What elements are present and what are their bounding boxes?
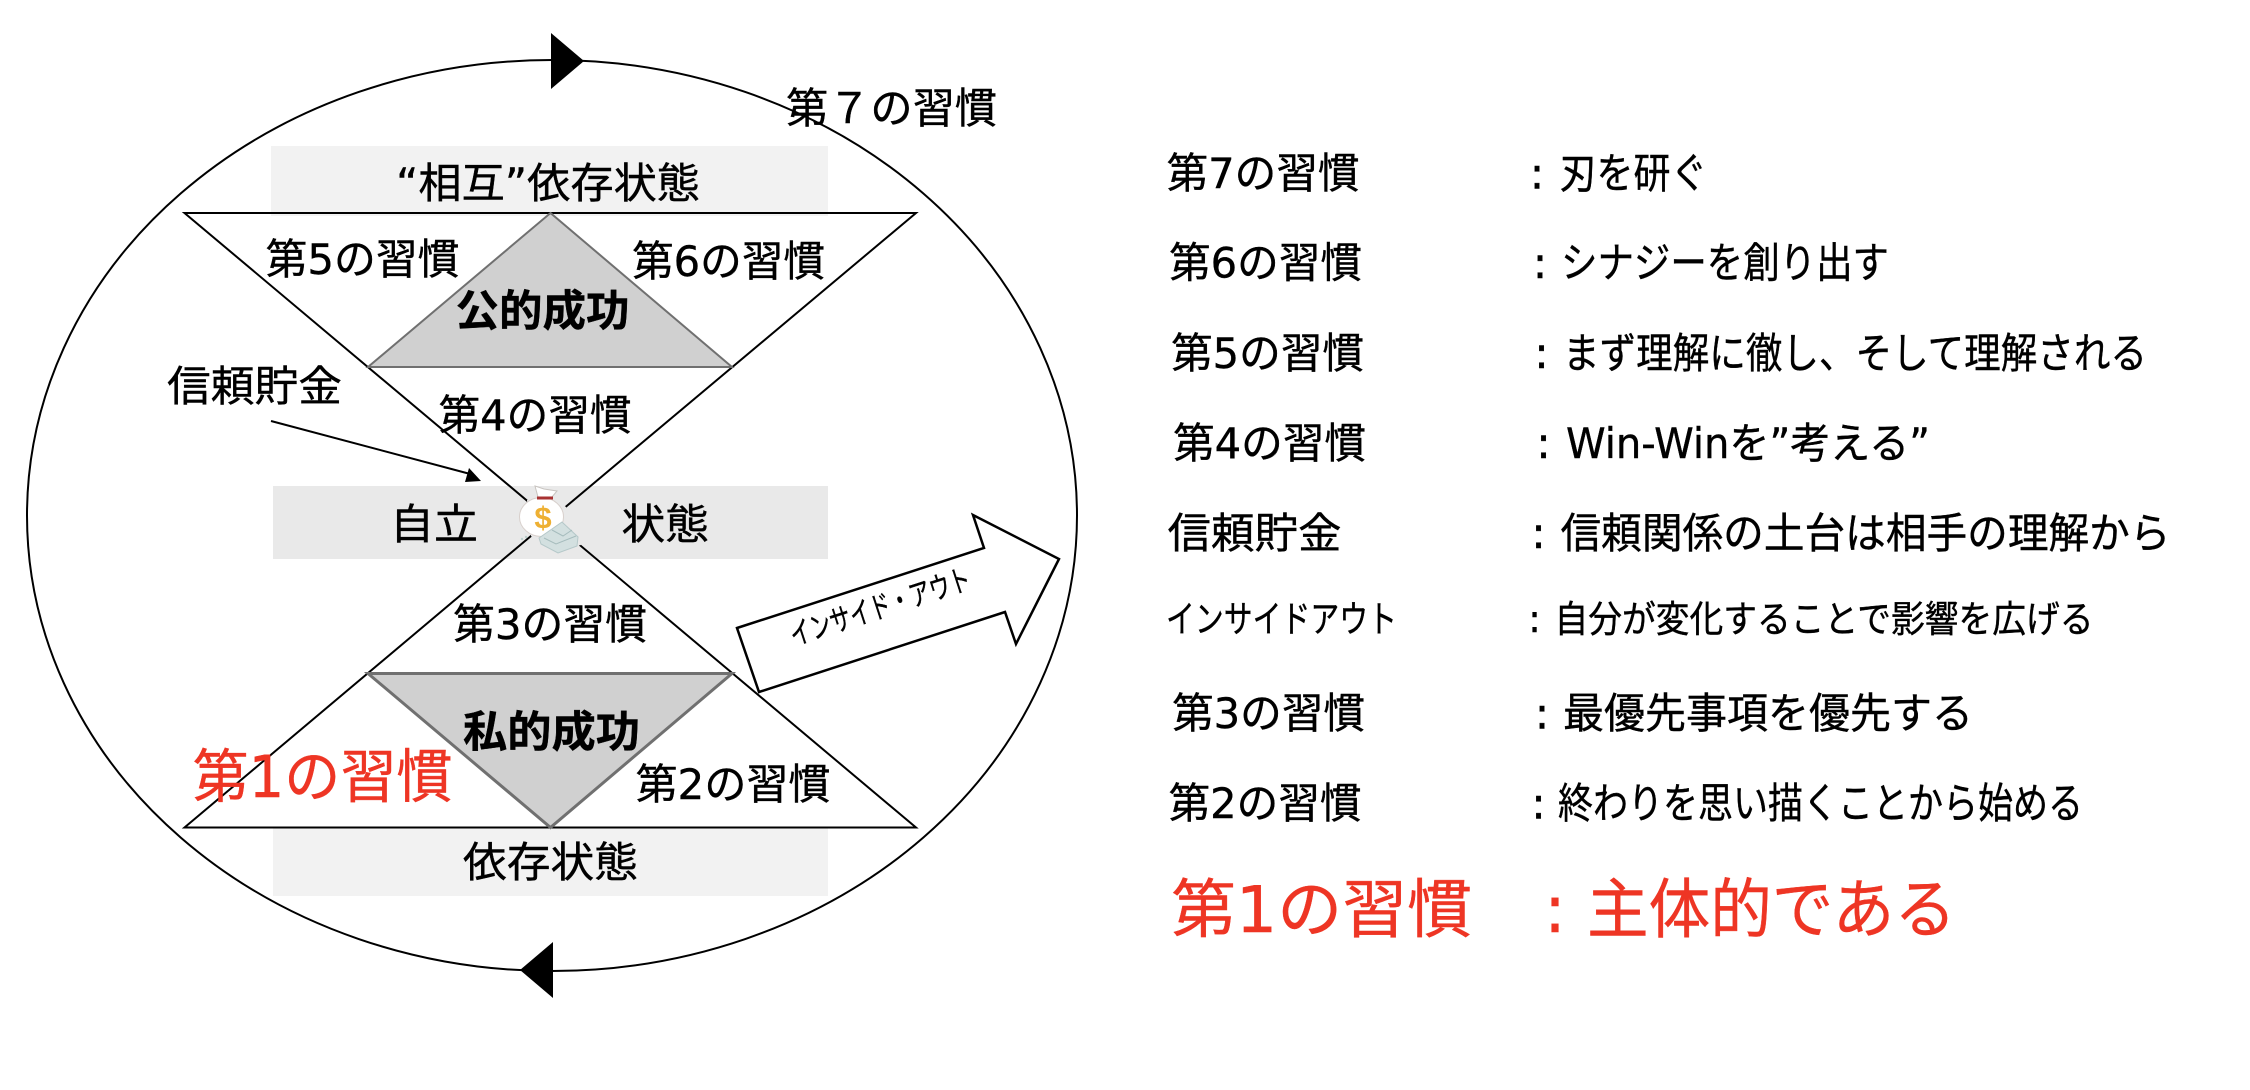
row: habit 1 highlighted: 主体的である bbox=[1587, 873, 1956, 948]
label: habit 3: 第3の習慣 bbox=[453, 600, 647, 649]
row: habit 5: 第5の習慣 bbox=[1171, 329, 1364, 378]
row: habit 2 bbox=[1168, 778, 2083, 830]
row: habit 3: 第3の習慣 bbox=[1172, 689, 1365, 738]
label: private success: 私的成功 bbox=[463, 698, 640, 760]
label: habit 5: 第5の習慣 bbox=[266, 235, 460, 284]
row: habit 4: 第4の習慣 bbox=[1173, 419, 1366, 468]
label: habit 2: 第2の習慣 bbox=[636, 760, 830, 809]
row: inside-out bbox=[1166, 597, 2094, 641]
panel: habit list bbox=[1166, 148, 2170, 948]
row: emotional bank account: 信頼関係の土台は相手の理解から bbox=[1560, 509, 2170, 558]
row: habit 5: まず理解に徹し、そして理解される bbox=[1563, 329, 2147, 378]
row: emotional bank account: 信頼貯金 bbox=[1168, 509, 1342, 558]
row: habit 1 highlighted: 第1の習慣 bbox=[1171, 874, 1472, 948]
label: public success: 公的成功 bbox=[456, 277, 630, 339]
icon: money bag: $ bbox=[534, 500, 552, 535]
lower triangle bbox=[184, 520, 916, 828]
band: dependence bbox=[273, 828, 828, 896]
label: independent: 自立 bbox=[390, 500, 478, 549]
label: habit 1 highlighted: 第1の習慣 bbox=[192, 743, 452, 811]
arrow: inside-out bbox=[737, 515, 1059, 692]
row: habit 1 highlighted: : bbox=[1544, 871, 1566, 948]
row: emotional bank account: : bbox=[1531, 508, 1546, 559]
row: habit 7: : bbox=[1530, 148, 1544, 200]
row: habit 1 highlighted bbox=[1171, 871, 1956, 948]
row: inside-out: 自分が変化することで影響を広げる bbox=[1554, 598, 2094, 641]
icon: money bag bbox=[520, 486, 581, 553]
row: habit 3: : bbox=[1535, 688, 1549, 740]
arrow: bank account to centre bbox=[271, 421, 481, 482]
label: habit 7 on cycle: 第７の習慣 bbox=[786, 84, 997, 133]
row: habit 2: 第2の習慣 bbox=[1168, 779, 1362, 828]
label: inside-out: インサイド・アウト bbox=[786, 562, 975, 654]
heading: interdependent state: “相互”依存状態 bbox=[396, 159, 700, 208]
icon: bottom direction arrowhead bbox=[520, 942, 553, 998]
row: habit 5: : bbox=[1534, 328, 1549, 379]
private success gray triangle bbox=[368, 674, 732, 828]
band: independence bbox=[273, 486, 828, 559]
row: inside-out: インサイドアウト bbox=[1166, 598, 1397, 641]
label: habit 4: 第4の習慣 bbox=[438, 391, 632, 440]
row: habit 5 bbox=[1171, 328, 2147, 379]
row: habit 2: : bbox=[1531, 778, 1546, 830]
row: habit 3 bbox=[1172, 688, 1973, 740]
outer cycle ellipse bbox=[27, 60, 1077, 971]
row: habit 4 bbox=[1173, 418, 1930, 469]
row: habit 4: : bbox=[1536, 418, 1551, 469]
icon: top direction arrowhead bbox=[551, 33, 584, 89]
label: state: 状態 bbox=[622, 500, 709, 549]
row: inside-out: : bbox=[1528, 597, 1541, 641]
public success gray triangle bbox=[368, 213, 732, 367]
row: habit 4: Win-Winを”考える” bbox=[1566, 419, 1930, 468]
label: habit 6: 第6の習慣 bbox=[632, 237, 825, 286]
diagram: seven habits cycle bbox=[27, 33, 1077, 998]
band: interdependence bbox=[271, 146, 828, 216]
row: habit 6: 第6の習慣 bbox=[1169, 238, 1362, 288]
row: habit 6: シナジーを創り出す bbox=[1561, 238, 1889, 288]
row: habit 7: 刃を研ぐ bbox=[1560, 149, 1708, 198]
heading: dependent state: 依存状態 bbox=[463, 838, 638, 887]
row: habit 6 bbox=[1169, 238, 1889, 289]
label: emotional bank account: 信頼貯金 bbox=[167, 362, 342, 411]
row: habit 7: 第7の習慣 bbox=[1166, 149, 1360, 198]
row: habit 7 bbox=[1166, 148, 1708, 200]
row: habit 2: 終わりを思い描くことから始める bbox=[1558, 779, 2083, 828]
row: emotional bank account bbox=[1168, 508, 2170, 559]
upper inverted triangle bbox=[184, 213, 916, 520]
row: habit 3: 最優先事項を優先する bbox=[1563, 689, 1973, 738]
row: habit 6: : bbox=[1533, 238, 1547, 289]
